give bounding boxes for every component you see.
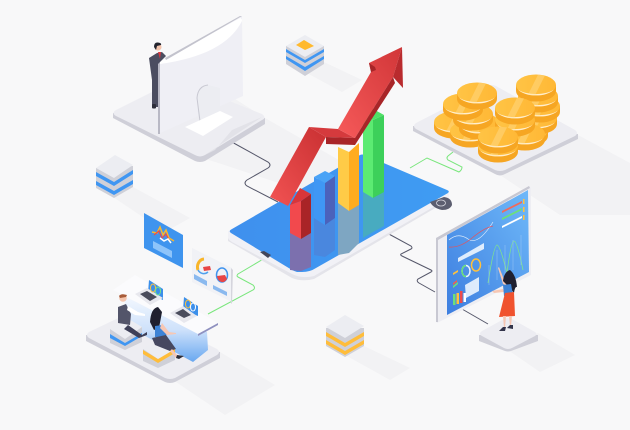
coin stacks (434, 74, 560, 162)
businessman (149, 42, 166, 108)
ground shadows (113, 62, 630, 415)
bar reflections (290, 192, 384, 271)
line charts (449, 222, 523, 285)
woman presenting (492, 267, 517, 331)
laptops (135, 280, 198, 323)
connector wires: green (208, 152, 462, 314)
donut charts (462, 259, 480, 276)
bar chart (290, 109, 384, 239)
panel: woman platform (479, 318, 538, 352)
text rows (458, 243, 484, 298)
icon: server box bottom (326, 315, 364, 357)
connector wires: dark (230, 141, 488, 324)
panel: mini report blue (144, 213, 183, 268)
trend arrow (270, 47, 403, 206)
red bar (290, 188, 311, 239)
panel: desk platform (86, 275, 220, 383)
green bar (363, 109, 384, 198)
stool man (110, 318, 142, 350)
icon: server box left (96, 155, 133, 198)
panel: coin platform (413, 74, 578, 176)
tablet button (430, 197, 452, 210)
panel: monitor platform (113, 16, 265, 162)
seated man (118, 294, 147, 338)
desk (113, 275, 218, 362)
panel: mini report white (192, 248, 233, 304)
tablet port (260, 251, 271, 258)
panel: tablet (228, 154, 452, 280)
icon: server box top (286, 35, 324, 76)
monitor (158, 16, 243, 136)
yellow bar (338, 143, 359, 211)
blue bar (314, 171, 335, 225)
stool woman (143, 339, 175, 368)
panel: analytics screen (436, 186, 531, 331)
seated woman (150, 307, 184, 359)
